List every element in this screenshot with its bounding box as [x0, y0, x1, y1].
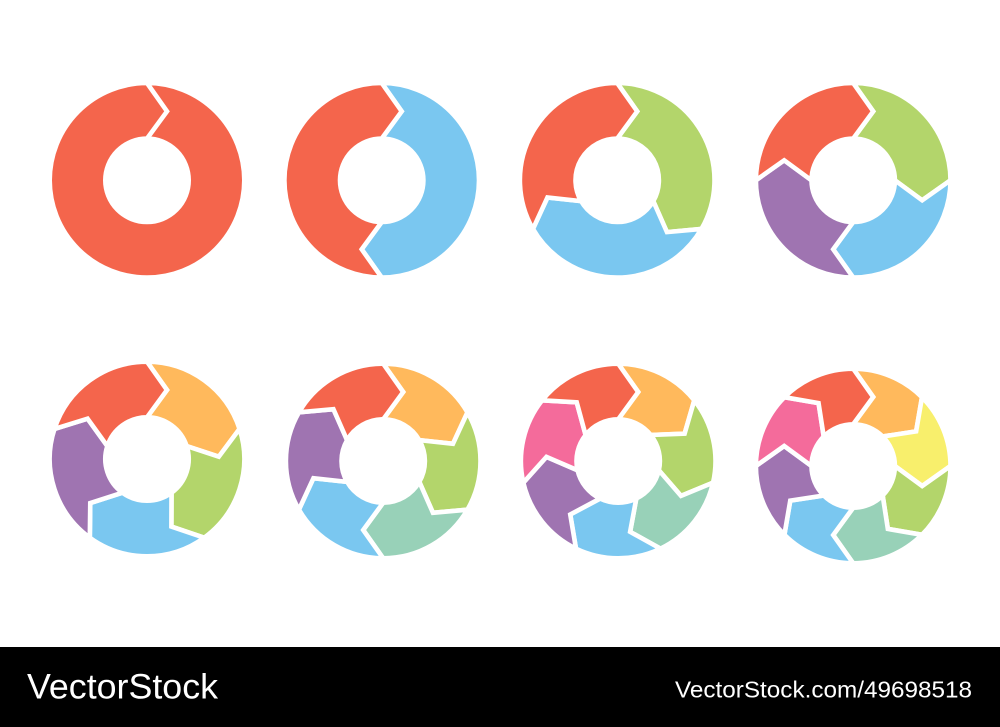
segment: teal — [825, 487, 922, 583]
segment: red — [50, 83, 244, 278]
segment: teal — [356, 470, 467, 583]
segment: green — [639, 400, 742, 504]
segment: red — [284, 83, 402, 278]
donut: 5 segments — [15, 341, 268, 592]
donut: 4 segments — [756, 83, 950, 278]
segment: orange — [383, 364, 467, 444]
segment: red — [756, 83, 873, 180]
segment: blue — [561, 484, 660, 582]
donut: 6 segments — [257, 339, 510, 583]
segment: yellow — [874, 397, 971, 494]
segment: blue — [362, 83, 479, 278]
segment: blue — [299, 478, 383, 558]
footer image id text: VectorStock.com/49698518 — [675, 676, 972, 702]
donut: 1 segment — [50, 83, 244, 278]
donut: 7 segments — [506, 341, 742, 582]
segment: purple — [15, 406, 146, 538]
segment: green — [617, 83, 714, 232]
segment: orange — [853, 369, 922, 437]
segment: green — [853, 83, 950, 200]
segment: pink — [506, 393, 593, 483]
segment: green — [398, 412, 510, 525]
segment: purple — [756, 160, 853, 278]
footer logo text: VectorStock — [27, 666, 218, 706]
segment: red — [784, 349, 881, 445]
donut: 3 segments — [484, 70, 714, 313]
segment: red — [542, 341, 645, 445]
segment: red — [299, 339, 410, 452]
segment: purple — [507, 451, 607, 549]
segment: red — [484, 70, 662, 229]
segment: purple — [736, 438, 832, 535]
donut: 2 segments — [284, 83, 479, 278]
segment: purple — [257, 397, 368, 510]
segment: green — [883, 466, 950, 535]
footer bar — [0, 647, 1000, 727]
segment: pink — [756, 397, 824, 466]
segment: orange — [147, 362, 240, 457]
segment: blue — [524, 154, 701, 313]
segment: blue — [784, 495, 853, 563]
segment: green — [149, 429, 268, 546]
segment: orange — [618, 364, 694, 435]
segment: blue — [833, 180, 950, 278]
donut: 8 segments — [736, 349, 971, 583]
segment: teal — [627, 467, 713, 557]
segment: blue — [73, 461, 204, 592]
segment: red — [54, 341, 173, 458]
